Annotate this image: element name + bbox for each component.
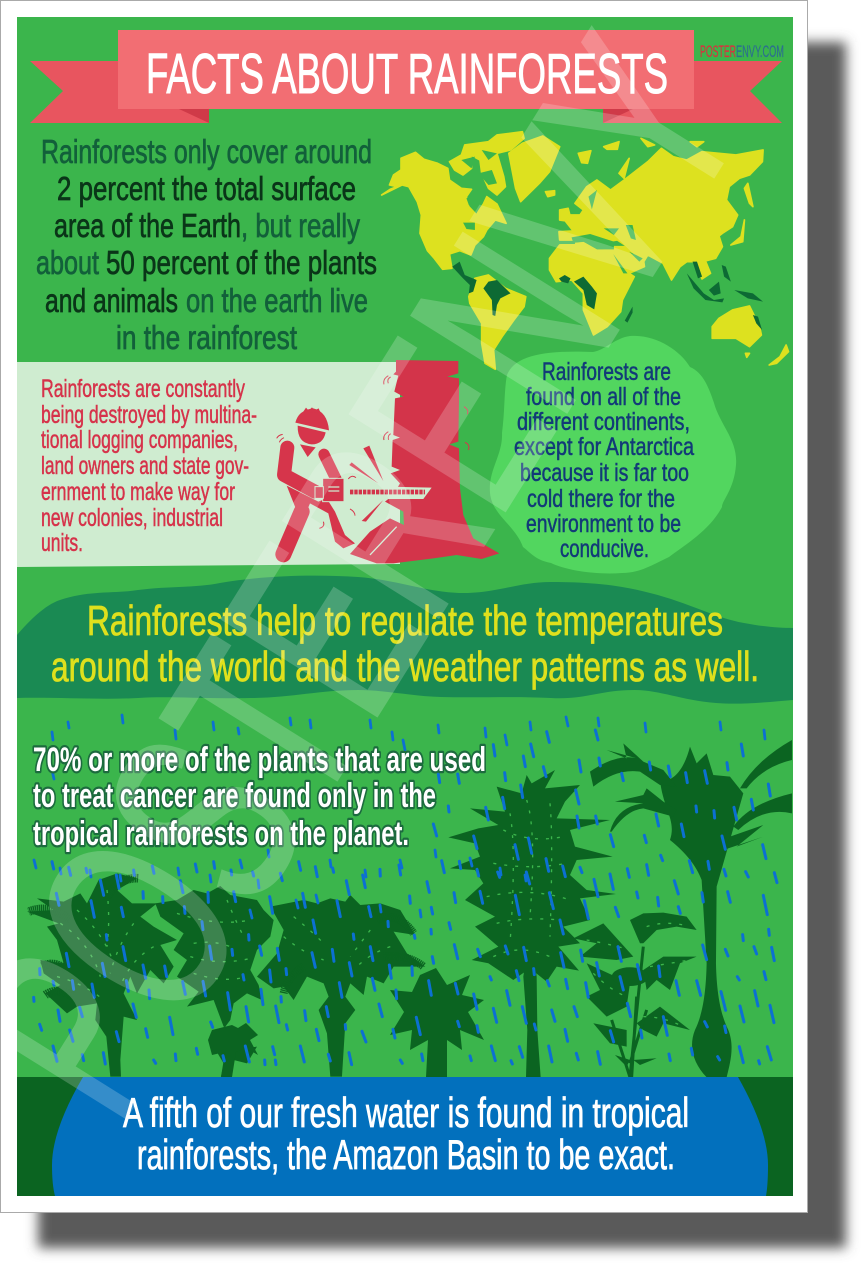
dark green wave xyxy=(17,576,793,704)
navy continents text: because it is far too xyxy=(520,459,689,487)
pale panel xyxy=(17,362,400,567)
ribbon tails xyxy=(30,61,782,123)
text: medicinal plants fact: tropical rainforests on the planet. xyxy=(33,815,409,853)
text: medicinal plants fact xyxy=(33,741,486,853)
white water text xyxy=(123,1089,689,1178)
palm C xyxy=(257,895,425,1077)
navy continents text: Rainforests are xyxy=(542,358,671,386)
blue basin xyxy=(52,1077,768,1196)
navy continents text: conducive. xyxy=(560,535,649,563)
wood chips and motion marks xyxy=(277,376,469,555)
palm A xyxy=(27,873,177,1077)
tree group: right trees xyxy=(448,740,792,1077)
seas xyxy=(461,150,643,273)
intro text block: and animals xyxy=(45,282,178,319)
red logging text: units. xyxy=(41,529,83,557)
broadleaf tree E xyxy=(448,770,616,1077)
red logging text: land owners and state gov- xyxy=(41,452,249,480)
intro text block: about xyxy=(36,244,99,281)
red logging text: being destroyed by multina- xyxy=(41,401,257,429)
intro text block: 2 percent the total surface xyxy=(57,170,356,207)
dark green base xyxy=(17,1077,793,1196)
small lower palm xyxy=(208,1023,258,1077)
intro text block: Rainforests only cover around xyxy=(41,133,372,170)
ribbon centre xyxy=(118,30,694,109)
rain: upper field xyxy=(34,715,765,918)
navy continents text: found on all of the xyxy=(526,383,681,411)
intro text block: in the rainforest xyxy=(116,319,297,356)
navy continents text: different continents, xyxy=(517,408,690,436)
chainsaw xyxy=(315,478,432,502)
rainforest regions xyxy=(452,262,763,330)
yellow climate text xyxy=(51,597,759,690)
blob callout: continents xyxy=(490,336,736,573)
intro text block: 50 percent of the plants xyxy=(106,244,377,281)
intro text block xyxy=(36,133,377,356)
intro text block: , but really xyxy=(241,207,360,244)
rain drops xyxy=(34,715,777,1065)
text: medicinal plants fact: to treat cancer are found only in the xyxy=(33,777,436,815)
red logging text: new colonies, industrial xyxy=(41,504,223,532)
red logging text: tional logging companies, xyxy=(41,426,238,454)
publisher logo: POSTER xyxy=(700,42,736,61)
tree B xyxy=(155,886,274,1077)
continents xyxy=(382,132,788,369)
red logging text: ernment to make way for xyxy=(41,478,235,506)
world map xyxy=(382,132,788,369)
light green blob xyxy=(490,336,736,573)
forest silhouettes xyxy=(27,740,792,1077)
text: medicinal plants fact: 70% or more of the plants that are used xyxy=(33,741,486,779)
navy continents text xyxy=(514,358,694,563)
tree stump xyxy=(350,360,499,563)
bottle palm G xyxy=(590,740,792,1077)
tree group: left palms xyxy=(27,873,425,1077)
rain: right group xyxy=(433,730,777,1064)
logger xyxy=(283,407,355,554)
navy continents text: except for Antarctica xyxy=(514,433,694,461)
panel: fresh water fact xyxy=(17,1077,793,1196)
title banner xyxy=(30,30,782,123)
navy continents text: cold there for the xyxy=(527,485,675,513)
navy continents text: environment to be xyxy=(526,510,681,538)
fern palm F xyxy=(573,913,697,1077)
rain: left group xyxy=(34,862,434,1065)
intro text block: area of the Earth xyxy=(54,207,241,244)
red logging text: Rainforests are constantly xyxy=(41,375,245,403)
small palm D xyxy=(390,968,484,1077)
icon: logger cutting tree with chainsaw xyxy=(277,360,499,563)
red logging text xyxy=(41,375,257,557)
wave band: climate fact xyxy=(17,576,793,704)
publisher logo: ENVY.COM xyxy=(736,42,784,61)
panel: logging destruction xyxy=(17,360,499,567)
intro text block: on the earth live xyxy=(186,282,368,319)
